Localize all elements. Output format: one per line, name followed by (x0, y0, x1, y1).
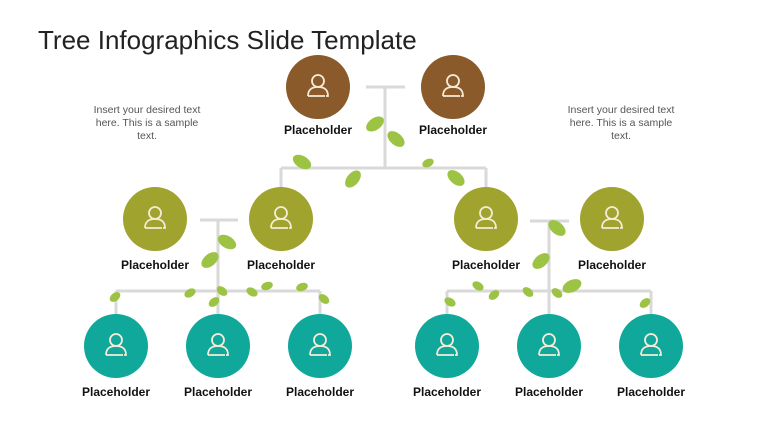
text block right: here. This is a sample (570, 117, 672, 129)
teal nodes (84, 314, 683, 378)
leaves (108, 113, 652, 310)
olive nodes (123, 187, 644, 251)
text block right: Insert your desired text (568, 104, 674, 116)
text block left: text. (137, 130, 157, 142)
text block right: text. (611, 130, 631, 142)
tree lines (116, 87, 651, 316)
labels: Placeholder (247, 258, 315, 272)
labels: Placeholder (184, 385, 252, 399)
title: Tree Infographics Slide Template (38, 25, 417, 55)
labels: Placeholder (419, 123, 487, 137)
brown nodes (286, 55, 485, 119)
labels: Placeholder (452, 258, 520, 272)
labels: Placeholder (617, 385, 685, 399)
labels (82, 123, 685, 399)
labels: Placeholder (82, 385, 150, 399)
text block left (94, 104, 200, 142)
labels: Placeholder (284, 123, 352, 137)
text block left: here. This is a sample (96, 117, 198, 129)
labels: Placeholder (578, 258, 646, 272)
labels: Placeholder (413, 385, 481, 399)
labels: Placeholder (286, 385, 354, 399)
labels: Placeholder (515, 385, 583, 399)
labels: Placeholder (121, 258, 189, 272)
text block left: Insert your desired text (94, 104, 200, 116)
text block right (568, 104, 674, 142)
